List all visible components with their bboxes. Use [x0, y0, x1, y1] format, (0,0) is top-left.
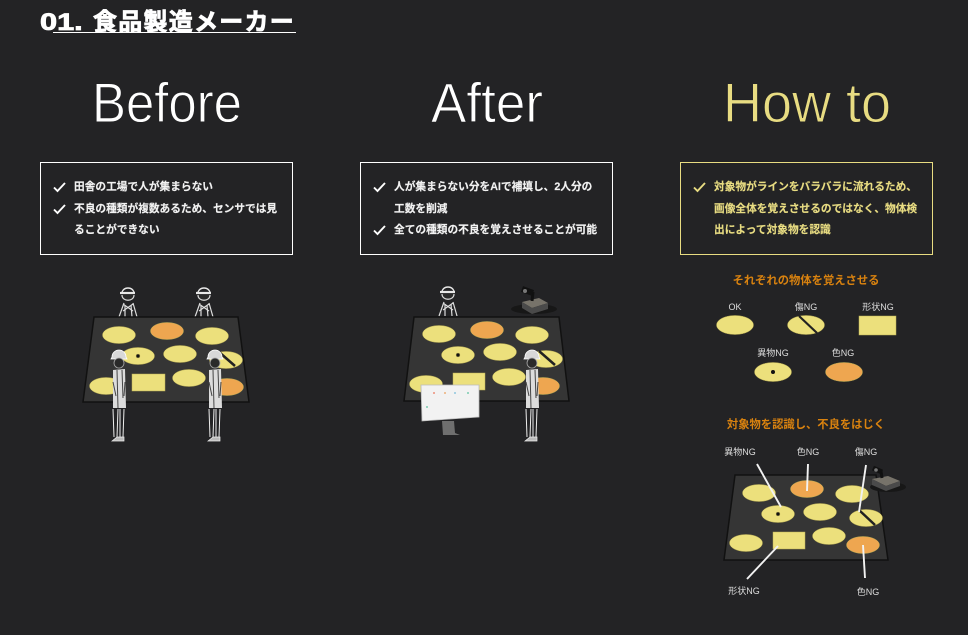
objects on table	[90, 322, 244, 396]
heading: Before: Before	[92, 71, 242, 134]
camera	[511, 289, 557, 314]
camera	[870, 468, 906, 492]
callout labels: 色NG	[857, 586, 879, 597]
illustration: detection scene	[723, 446, 906, 597]
OK sample	[716, 302, 754, 334]
panel: how-to text box	[680, 162, 933, 255]
illustration: after scene	[403, 286, 570, 442]
leader lines	[747, 464, 866, 579]
objects on table	[730, 480, 882, 554]
foreign object NG sample	[754, 347, 792, 382]
callout labels: 形状NG	[728, 585, 760, 596]
conveyor table	[724, 475, 888, 560]
callout labels: 色NG	[797, 446, 819, 457]
color NG sample: 色NG	[832, 347, 854, 358]
OK sample: OK	[728, 302, 742, 312]
front worker	[524, 350, 540, 441]
objects on table	[410, 322, 562, 394]
panel: before text box: 不良の種類が複数あるため、センサでは見	[74, 203, 277, 215]
shape NG sample	[859, 301, 896, 335]
front workers	[111, 350, 223, 441]
foreign object NG sample: 異物NG	[757, 347, 789, 358]
title: 01.	[40, 9, 83, 36]
color NG sample	[826, 347, 862, 382]
monitor	[421, 385, 479, 435]
panel: after text box	[360, 162, 613, 255]
heading: learn each object: それぞれの物体を覚えさせる	[733, 275, 879, 287]
damage NG sample: 傷NG	[795, 301, 817, 312]
callout labels: 異物NG	[724, 446, 756, 457]
title: 食品製造メーカー	[93, 9, 295, 36]
panel: after text box: 工数を削減	[394, 203, 447, 215]
panel: before text box	[40, 162, 293, 255]
panel: how-to text box: 対象物がラインをバラバラに流れるため、	[714, 181, 917, 193]
panel: after text box: 人が集まらない分をAIで補填し、2人分の	[394, 181, 592, 193]
shape NG sample: 形状NG	[862, 301, 894, 312]
panel: before text box: 田舎の工場で人が集まらない	[74, 181, 213, 193]
heading: After: After	[431, 71, 543, 134]
conveyor table	[83, 317, 249, 402]
conveyor table	[404, 317, 569, 401]
panel: before text box: ることができない	[74, 224, 160, 236]
heading: How to: How to	[723, 71, 891, 134]
panel: how-to text box: 出によって対象物を認識	[714, 224, 831, 236]
back worker	[439, 287, 457, 316]
heading: recognize and reject: 対象物を認識し、不良をはじく	[727, 419, 885, 431]
illustration: before scene	[82, 287, 250, 442]
legend: object types	[716, 301, 896, 382]
panel: how-to text box: 画像全体を覚えさせるのではなく、物体検	[714, 203, 917, 215]
panel: after text box: 全ての種類の不良を覚えさせることが可能	[394, 224, 597, 236]
callout labels: 傷NG	[855, 446, 877, 457]
callout labels	[724, 446, 879, 597]
back workers	[119, 288, 213, 317]
damage NG sample	[788, 301, 824, 334]
